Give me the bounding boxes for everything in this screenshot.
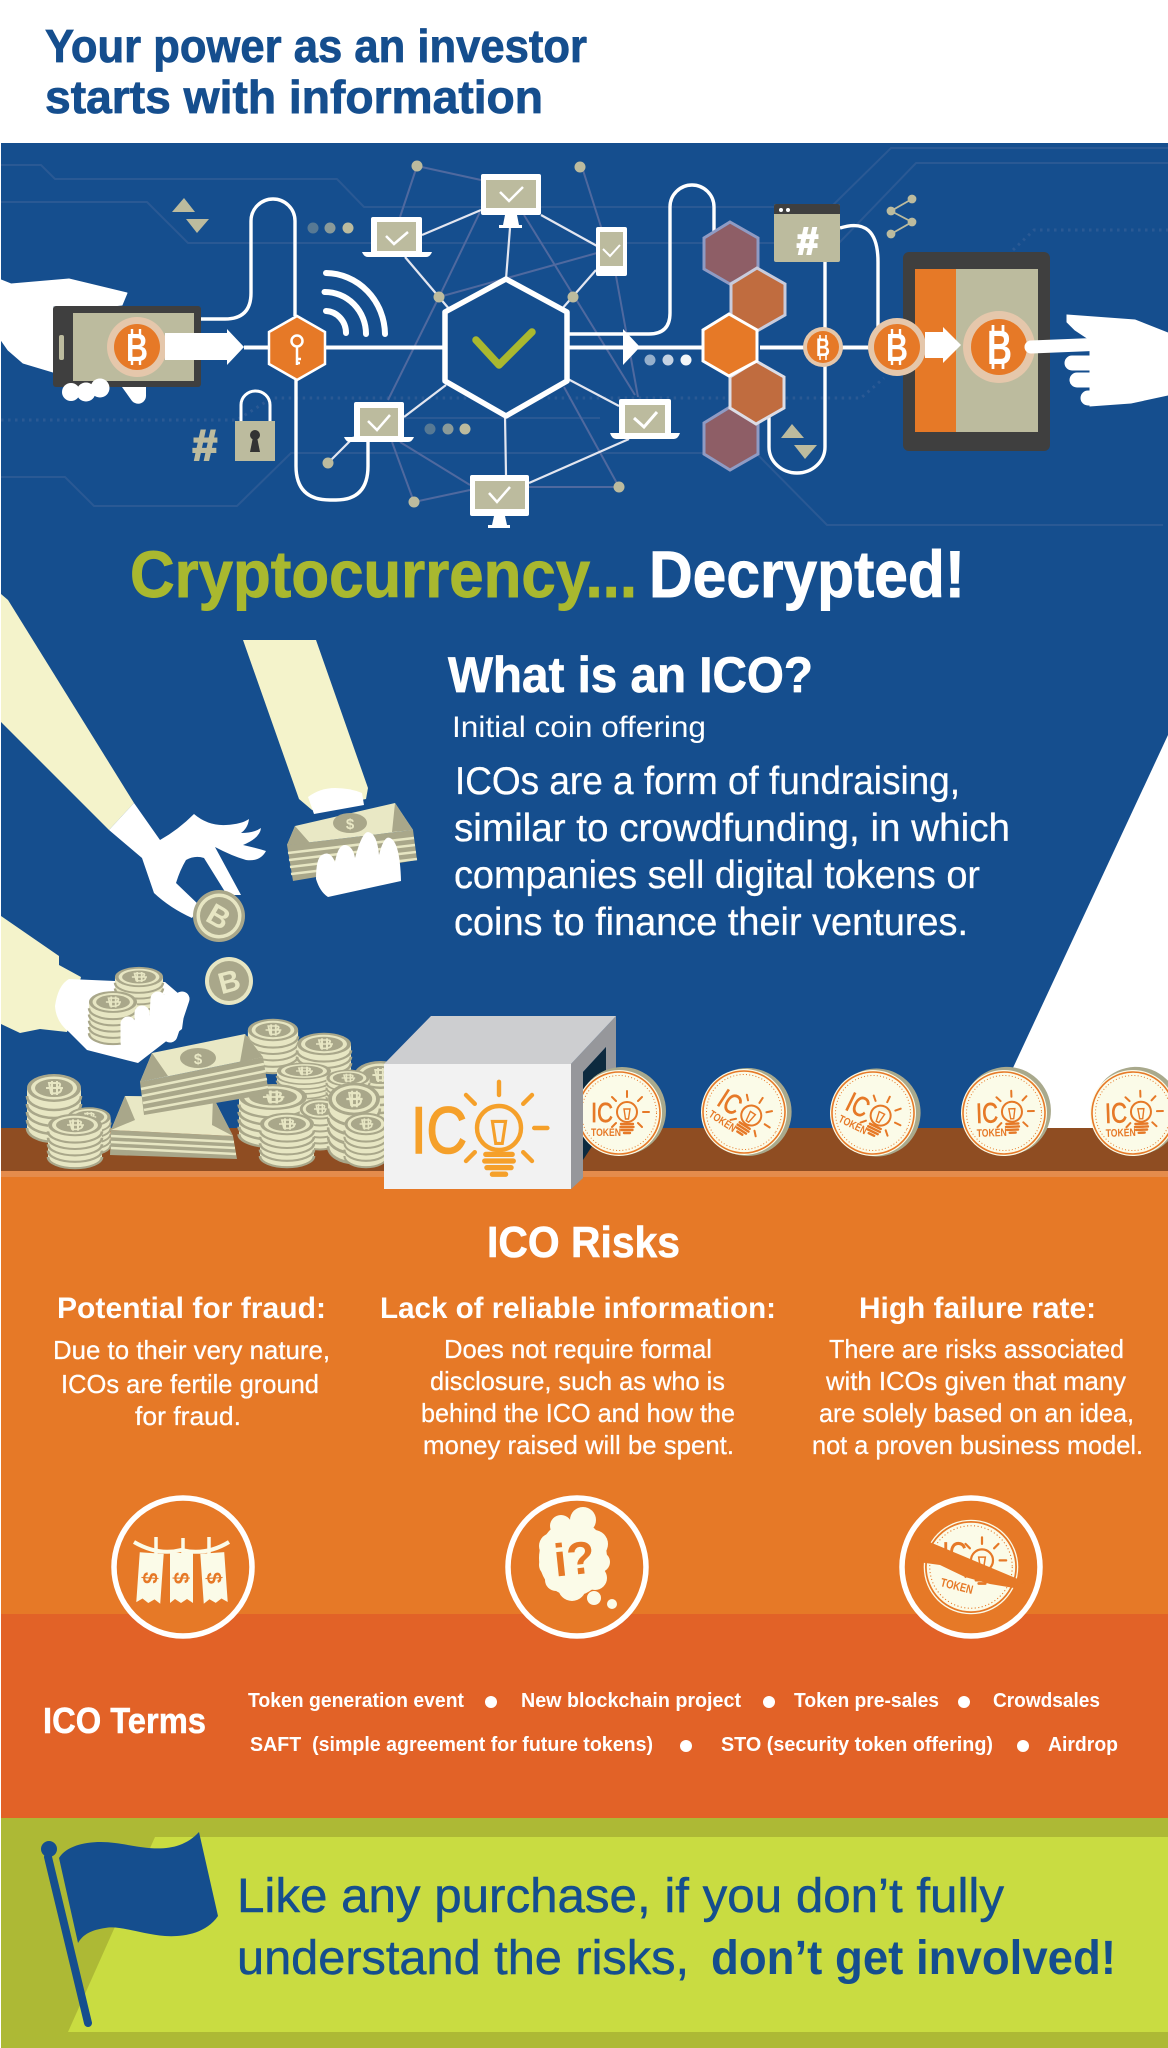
- token coin 4: TOKEN: [977, 1127, 1007, 1140]
- heading: what is an ICO: What is an ICO?: [448, 647, 813, 703]
- warning inner band: [68, 1837, 1168, 2032]
- device: laptop right: [610, 399, 680, 439]
- heading: Cryptocurrency Decrypted: Cryptocurrency...: [130, 537, 637, 611]
- token coin 2: IC: [712, 1083, 748, 1121]
- column: high failure rate: not a proven business model.: [812, 1430, 1143, 1460]
- icon: money on clothesline: $: [202, 1571, 225, 1585]
- device: monitor bottom: [470, 475, 529, 528]
- token coin 3: TOKEN: [836, 1113, 869, 1137]
- icon: bitcoin coin left of arrow: B: [886, 327, 908, 370]
- illustration: hands, coins and cash: [1, 594, 417, 1168]
- icon: tablet: [903, 252, 1050, 451]
- panel: ICO risks background: [1, 1177, 1168, 1614]
- description: companies sell digital tokens or: [454, 854, 980, 897]
- bottom cash stack: [110, 1096, 237, 1159]
- left hand: [1, 279, 127, 372]
- white network lines: [328, 210, 629, 483]
- circuit background lines: [1, 148, 1168, 525]
- icon: small bitcoin coin: B: [816, 334, 830, 362]
- icon: key hexagon: [269, 316, 325, 380]
- text block: what is an ICO: [448, 647, 1010, 944]
- arm with cash: $: [346, 816, 355, 833]
- heading: ICO risks: ICO Risks: [487, 1218, 680, 1267]
- token coin 3: [816, 1053, 935, 1172]
- device: laptop lower left: [344, 402, 414, 442]
- token coin 1: TOKEN: [591, 1127, 621, 1139]
- arrow head on main line: [623, 329, 640, 365]
- icon: padlock: [235, 391, 275, 461]
- terms row one: Token pre-sales: [794, 1690, 939, 1712]
- title: Your power as an investor: [45, 20, 587, 72]
- conveyor brown band: [1, 1128, 1168, 1171]
- column: lack of reliable information: [380, 1292, 776, 1460]
- token coin 2: TOKEN: [706, 1108, 738, 1135]
- panel: ICO terms: [43, 1690, 1118, 1756]
- network nodes: [322, 160, 624, 508]
- column: high failure rate: [812, 1292, 1143, 1460]
- column: potential for fraud: for fraud.: [135, 1401, 241, 1431]
- coin: falling bitcoin two: B: [215, 964, 244, 1001]
- icon: share: [888, 196, 916, 238]
- device: monitor top: [481, 174, 541, 228]
- background: blue panel: [1, 143, 1168, 1128]
- column: high failure rate: There are risks associated: [829, 1334, 1124, 1364]
- icon: broken token: [902, 1498, 1040, 1636]
- device: phone right: [596, 227, 627, 276]
- terms row one: New blockchain project: [521, 1690, 741, 1712]
- icon: large bitcoin coin: B: [987, 322, 1012, 375]
- icon: wifi: [324, 273, 385, 334]
- icon: broken token: TOKEN: [939, 1575, 975, 1597]
- icon: dots after arrow: [644, 354, 692, 366]
- column: lack of reliable information: behind the ICO and how the: [421, 1398, 735, 1428]
- subheading: Initial coin offering: [452, 711, 706, 744]
- white pipelines: [201, 185, 1000, 500]
- description: coins to finance their ventures.: [454, 901, 968, 944]
- icon: flag: [41, 1832, 218, 2023]
- column: lack of reliable information: Lack of reliable information:: [380, 1292, 776, 1325]
- network diagram: [1, 160, 1168, 528]
- terms row two: [250, 1734, 1118, 1756]
- description: similar to crowdfunding, in which: [454, 807, 1010, 850]
- column: high failure rate: are solely based on an idea,: [819, 1398, 1134, 1428]
- warning message: understand the risks,: [237, 1932, 689, 1985]
- icon: dots lower: [424, 424, 470, 434]
- terms row one: Token generation event: [248, 1690, 464, 1712]
- token coin 3: IC: [841, 1086, 875, 1124]
- panel: warning background: [1, 1818, 1168, 2048]
- token coin 1: [576, 1067, 666, 1156]
- terms row two: SAFT (simple agreement for future tokens): [250, 1734, 653, 1756]
- spotlight beam: [985, 735, 1168, 1128]
- device: laptop top left: [362, 217, 432, 257]
- token coin 5: TOKEN: [1106, 1127, 1136, 1140]
- coin: falling bitcoin one: [193, 890, 245, 942]
- icon: three dots: [308, 222, 354, 234]
- column: lack of reliable information: disclosure, such as who is: [430, 1366, 725, 1396]
- column: potential for fraud: Due to their very nature,: [53, 1335, 330, 1365]
- icon: triangles right: [781, 424, 817, 459]
- arrow: phone to key: [165, 329, 244, 365]
- terms row two: Airdrop: [1048, 1734, 1118, 1756]
- machine logo: [411, 1082, 547, 1174]
- icon: money on clothesline: [114, 1498, 252, 1636]
- terms row one: Crowdsales: [993, 1690, 1100, 1712]
- arrow: coin to coin: [925, 327, 961, 363]
- icon: hexagon chain: [703, 222, 785, 470]
- icon: money on clothesline: $: [169, 1572, 192, 1584]
- token coin 4: IC: [975, 1097, 999, 1129]
- description: ICOs are a form of fundraising,: [455, 760, 960, 803]
- icon: small bitcoin coin: [803, 327, 843, 367]
- tilted cash stack: $: [194, 1051, 203, 1068]
- terms row one: [248, 1690, 1100, 1712]
- column: potential for fraud: ICOs are fertile ground: [61, 1369, 319, 1399]
- panel: ICO terms background: [1, 1614, 1168, 1818]
- column: lack of reliable information: Does not require formal: [444, 1334, 712, 1364]
- warning message: don’t get involved!: [711, 1932, 1116, 1985]
- column: high failure rate: with ICOs given that many: [825, 1366, 1126, 1396]
- column: potential for fraud: Potential for fraud:: [57, 1292, 326, 1325]
- heading: Cryptocurrency Decrypted: Decrypted!: [649, 537, 965, 611]
- background: white header: [0, 0, 1168, 143]
- token coin 2: [685, 1050, 808, 1174]
- fingers of holding hand: [128, 999, 182, 1042]
- icon: money on clothesline: $: [138, 1571, 161, 1585]
- token coins on conveyor: [576, 1050, 1168, 1174]
- machine rear side and opening: [571, 1016, 616, 1189]
- heading: Cryptocurrency Decrypted: [130, 537, 965, 611]
- terms row two: STO (security token offering): [721, 1734, 993, 1756]
- machine logo: IC: [411, 1093, 467, 1167]
- icon: thought cloud: i?: [551, 1531, 597, 1587]
- description: [454, 760, 1010, 944]
- arm holding coins: [1, 916, 186, 1063]
- right pointing hand: [1031, 315, 1168, 406]
- warning message: Like any purchase, if you don’t fully: [237, 1870, 1004, 1923]
- icon: thought cloud: [508, 1498, 646, 1636]
- token coin 5: IC: [1104, 1097, 1128, 1129]
- icon: phone with hand: B: [126, 327, 148, 370]
- icon: central hexagon check: [445, 279, 567, 416]
- icon: hash: #: [192, 421, 217, 470]
- faint network lines: [388, 166, 638, 502]
- icon: broken token: IC: [942, 1536, 967, 1571]
- column: lack of reliable information: money raised will be spent.: [423, 1430, 734, 1460]
- icon: up down triangles: [172, 198, 209, 233]
- icon: hash window: [774, 204, 840, 263]
- coin: falling bitcoin one: B: [201, 898, 236, 937]
- pile of coin stacks: [27, 1019, 406, 1168]
- icon: hash window: #: [796, 221, 818, 263]
- arm with cash: [243, 640, 417, 897]
- heading: ICO terms: ICO Terms: [43, 1700, 206, 1741]
- token coin 4: [959, 1065, 1052, 1157]
- ICO machine box: [384, 1016, 616, 1189]
- icon: bitcoin coin left of arrow: [868, 318, 926, 376]
- icon: phone with hand: [1, 279, 201, 404]
- warning message: [237, 1870, 1116, 1985]
- coin: falling bitcoin two: [205, 957, 253, 1005]
- arm with coin: [1, 594, 266, 918]
- title: [45, 20, 587, 123]
- token coin 5: [1088, 1065, 1168, 1157]
- column: high failure rate: High failure rate:: [859, 1292, 1096, 1325]
- title: starts with information: [45, 71, 543, 123]
- icon: large bitcoin coin: [963, 311, 1035, 383]
- column: potential for fraud: [53, 1292, 330, 1431]
- token coin 1: IC: [591, 1097, 613, 1128]
- tilted cash stack: [140, 1034, 269, 1115]
- panel: ICO risks: [53, 1218, 1143, 1460]
